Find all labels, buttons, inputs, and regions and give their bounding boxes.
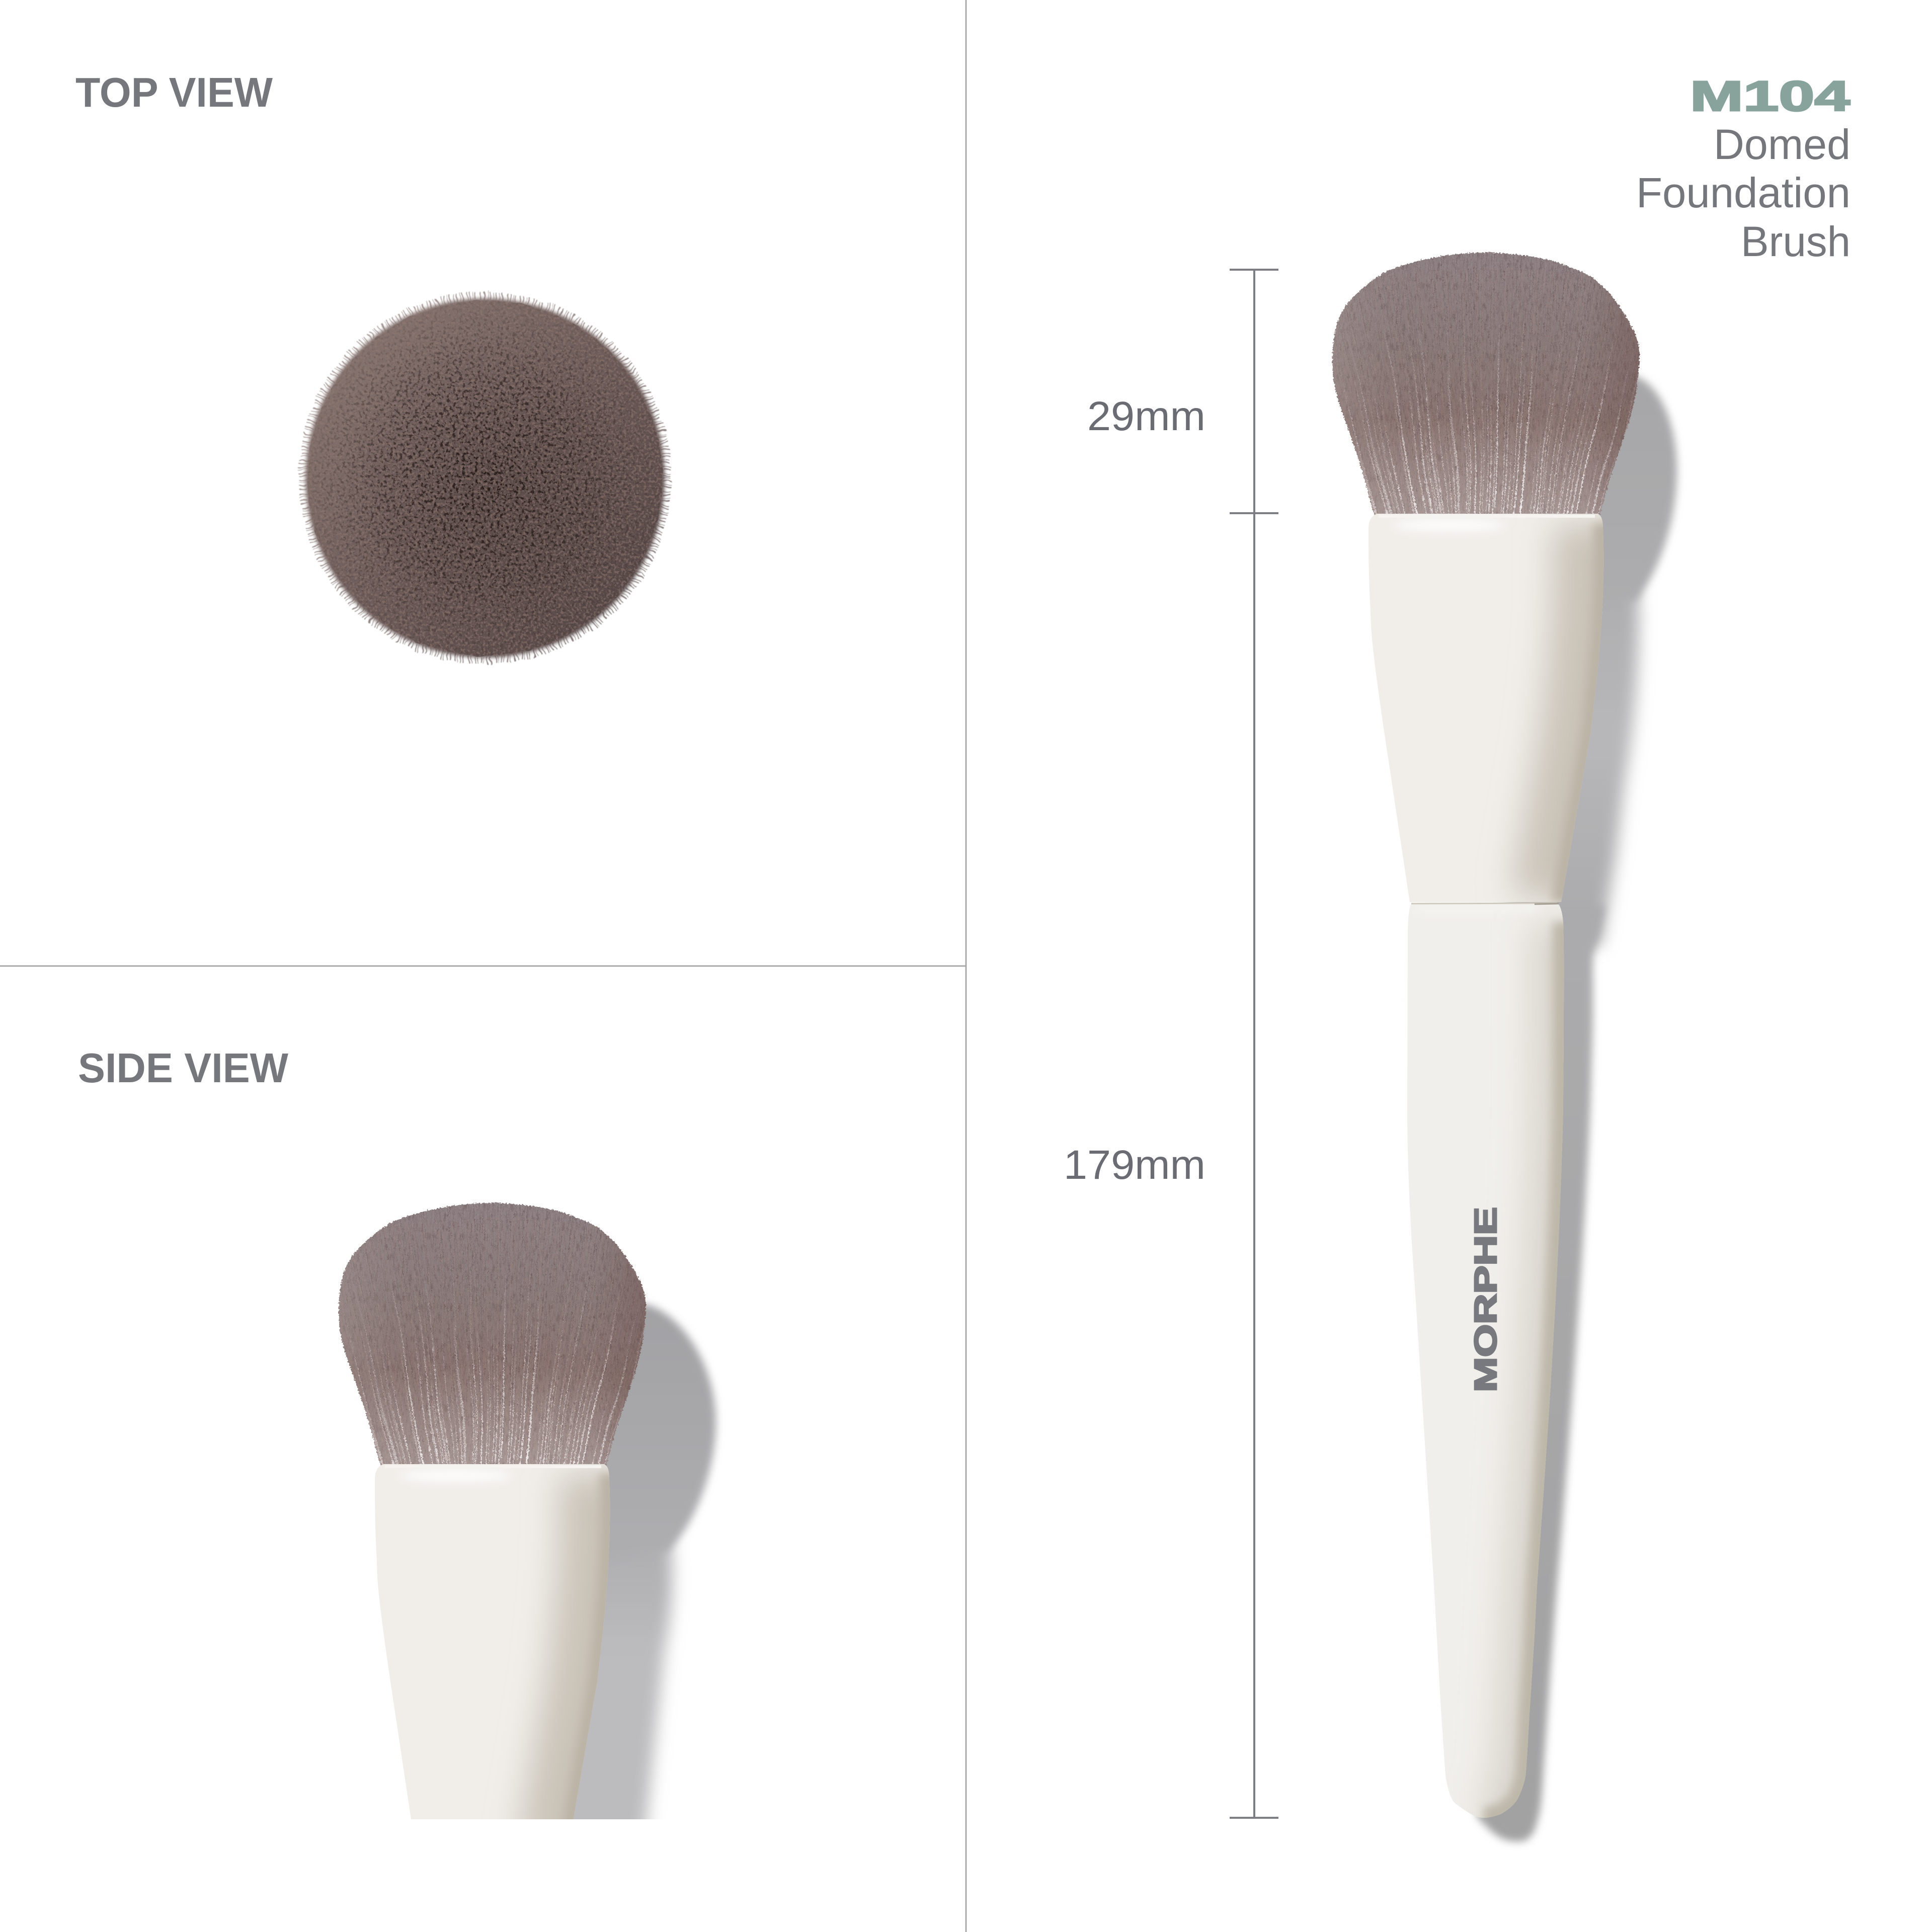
product name <box>1636 121 1850 265</box>
shadow: side view <box>574 1299 721 1819</box>
heading: side view: SIDE VIEW <box>78 1044 289 1091</box>
ferrule: side view <box>375 1464 610 1853</box>
dimension bracket <box>1230 269 1278 1818</box>
full brush <box>1302 249 1677 1841</box>
ferrule: full brush <box>1369 514 1603 902</box>
shadow: full brush <box>1459 374 1677 1841</box>
handle logo: MORPHE <box>1469 1207 1503 1392</box>
brush head: top view <box>292 282 679 674</box>
bristles: full brush <box>1302 249 1669 526</box>
handle <box>1407 903 1564 1818</box>
product code: M104 <box>1690 72 1850 120</box>
bristles: side view <box>338 1202 647 1466</box>
heading: top view: TOP VIEW <box>75 69 273 116</box>
panel dividers <box>0 0 966 1932</box>
measurement: bristle length: 29mm <box>1087 393 1205 439</box>
measurement: handle length: 179mm <box>1064 1142 1205 1188</box>
product name: Domed <box>1714 121 1850 168</box>
product name: Foundation <box>1636 169 1850 216</box>
product name: Brush <box>1741 218 1850 265</box>
brush: side view close-up <box>338 1202 721 1819</box>
